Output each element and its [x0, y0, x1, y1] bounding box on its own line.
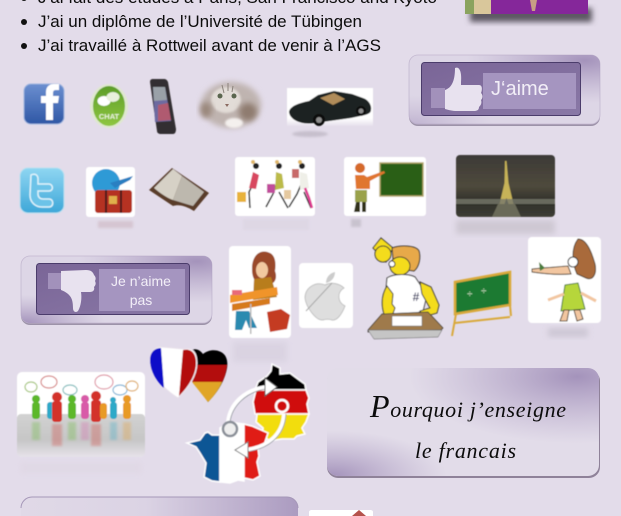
photo: cropped bottom picture	[309, 510, 373, 516]
illustration: woman with long nose	[528, 237, 601, 337]
icon: chat	[90, 84, 128, 128]
illustration: france and germany maps with arrows	[187, 364, 309, 483]
icon: thumbs down	[48, 270, 96, 312]
photo: suitcase and globe	[86, 167, 135, 228]
illustration: cartoon student at desk	[368, 238, 443, 339]
illustration: teacher at blackboard	[344, 157, 426, 227]
illustration: green blackboard on easel: ÷	[467, 289, 473, 300]
icon: twitter	[20, 168, 64, 213]
map: france	[187, 422, 268, 483]
map: germany	[253, 364, 309, 441]
text block: bullet list: J’ai travaillé à Rottweil avant de venir à l’AGS	[38, 36, 381, 55]
label: je n'aime pas: pas	[130, 292, 152, 308]
label: je n'aime pas: Je n’aime	[111, 273, 171, 289]
text block: bullet list: J’ai un diplôme de l’Université de Tübingen	[38, 12, 362, 31]
photo: black car	[287, 88, 373, 137]
panel: je n'aime pas button	[21, 256, 212, 325]
heading: script title: Pourquoi j’enseigne	[369, 388, 566, 424]
label: j'aime	[483, 73, 576, 109]
icon: chat: CHAT	[99, 112, 120, 121]
heading: script title: le francais	[415, 438, 516, 463]
photo: kitten	[200, 82, 261, 128]
icon: apple logo	[299, 263, 353, 328]
illustration: girl at school desk	[229, 246, 291, 362]
heading: script title	[369, 388, 566, 463]
illustration: green blackboard on easel: ÷	[481, 286, 487, 297]
illustration: cartoon student at desk: #	[413, 290, 420, 304]
photo: eiffel tower at night	[456, 155, 555, 234]
label: j'aime: J‘aime	[491, 78, 549, 100]
text block: bullet list	[21, 0, 437, 55]
illustration: green blackboard on easel	[452, 272, 511, 336]
icon: smartphone	[150, 79, 176, 134]
panel: bottom cropped	[21, 497, 298, 516]
arrows: exchange circle	[228, 387, 284, 450]
icon: french and german flag hearts	[150, 347, 227, 402]
icon: open book	[149, 168, 209, 211]
panel: j'aime button	[409, 55, 600, 126]
photo: colored people with speech bubbles	[17, 372, 145, 474]
photo: portrait	[465, 0, 592, 22]
illustration: shopping women	[235, 157, 315, 230]
icon: thumbs up	[431, 68, 482, 111]
label: je n'aime pas	[99, 269, 185, 311]
panel: pourquoi j'enseigne le francais	[327, 368, 600, 478]
icon: facebook	[24, 84, 64, 124]
